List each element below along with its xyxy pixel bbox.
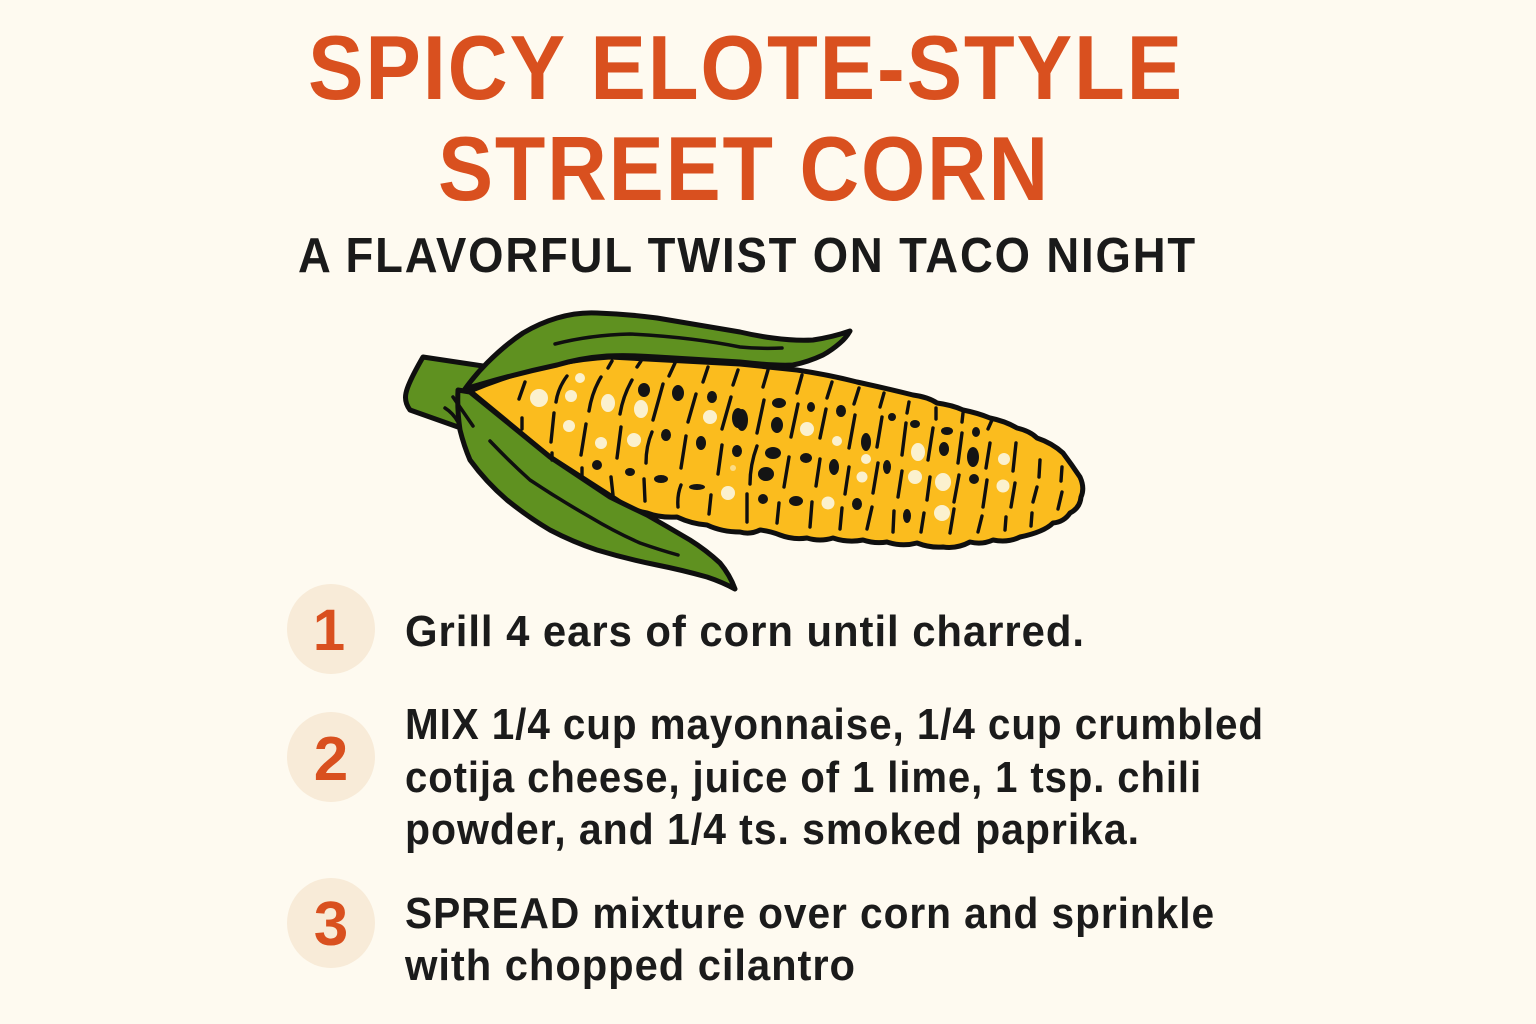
- step 3 text: [404, 889, 1215, 990]
- title: SPICY ELOTE-STYLE: [308, 18, 1184, 119]
- corn stem: [406, 357, 483, 427]
- step 2 text: cotija cheese, juice of 1 lime, 1 tsp. chili: [405, 753, 1202, 802]
- step 1 text: Grill 4 ears of corn until charred.: [405, 607, 1085, 656]
- step 3 badge: 3: [314, 890, 348, 959]
- step 3 badge: [287, 878, 375, 968]
- step 3 text: with chopped cilantro: [404, 941, 856, 990]
- subtitle: A FLAVORFUL TWIST ON TACO NIGHT: [298, 229, 1197, 283]
- step 1 badge: [287, 584, 375, 674]
- step 1: [287, 584, 1085, 674]
- step 2 text: [405, 700, 1264, 854]
- step 3 text: SPREAD mixture over corn and sprinkle: [405, 889, 1215, 938]
- step 2: [287, 700, 1264, 854]
- char spots: [592, 383, 980, 523]
- corn cob body: [470, 357, 1083, 547]
- title: [308, 18, 1184, 220]
- step 2 text: powder, and 1/4 ts. smoked paprika.: [405, 805, 1140, 854]
- step 1 badge: 1: [313, 598, 345, 663]
- illustration: grilled corn cob: [406, 313, 1083, 589]
- step 3: [287, 878, 1215, 990]
- husk fold lines: [445, 334, 782, 555]
- kernel row marks: [519, 361, 1062, 533]
- step 2 badge: 2: [314, 725, 348, 794]
- title: STREET CORN: [438, 119, 1050, 220]
- cheese crumbles: [530, 373, 1010, 521]
- lower husk leaf: [458, 390, 735, 589]
- upper husk leaf: [465, 313, 850, 389]
- step 2 badge: [287, 712, 375, 802]
- step 2 text: MIX 1/4 cup mayonnaise, 1/4 cup crumbled: [405, 700, 1264, 749]
